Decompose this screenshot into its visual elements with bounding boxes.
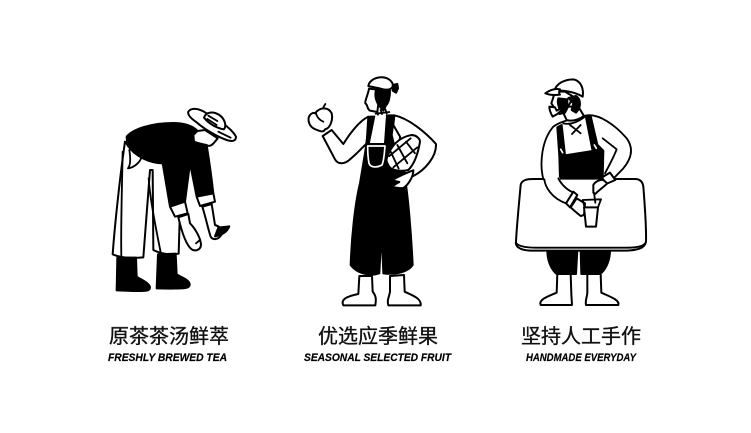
figure: barista with table and drink [516, 79, 646, 305]
basket [386, 135, 420, 171]
chinese heading: 坚持人工手作 [521, 325, 641, 348]
overall straps and bib [557, 116, 603, 179]
overalls [351, 115, 413, 275]
english subtitle: SEASONAL SELECTED FRUIT [304, 352, 452, 364]
left arm glove and leaf [197, 193, 229, 239]
black sweater and arms [127, 123, 213, 207]
english subtitle: FRESHLY BREWED TEA [108, 352, 227, 364]
shirt and collar [370, 109, 389, 143]
left arm raised [323, 117, 368, 163]
chinese heading: 优选应季鲜果 [318, 325, 438, 348]
english subtitle: HANDMADE EVERYDAY [526, 352, 637, 364]
head [193, 130, 218, 146]
arm outlines [603, 138, 617, 173]
hand holding basket [392, 170, 413, 188]
collar and x mark [563, 117, 584, 134]
cap [545, 79, 583, 97]
bib pocket [368, 146, 385, 167]
boots [540, 274, 619, 305]
caption: seasonal selected fruit [304, 325, 452, 364]
table [516, 179, 646, 251]
drink cup [583, 199, 601, 227]
trousers [547, 250, 610, 274]
caption: handmade everyday [521, 325, 641, 364]
face [365, 89, 380, 112]
caption: freshly brewed tea [108, 325, 229, 364]
straw hat [188, 109, 236, 141]
right cuff and hand [593, 173, 615, 203]
right arm [393, 115, 436, 176]
trousers [113, 142, 180, 258]
left sleeve [544, 177, 575, 204]
right arm glove [170, 202, 201, 250]
boots [343, 275, 421, 305]
headband [368, 77, 398, 93]
torso [542, 115, 631, 182]
left cuff and hand [566, 192, 585, 216]
beard and hair [558, 96, 580, 113]
neck [563, 107, 584, 121]
face [551, 92, 573, 114]
hair [375, 90, 390, 111]
figure: man holding apple and basket [309, 77, 436, 305]
ear [375, 93, 377, 101]
apple in hand [309, 104, 332, 131]
figure: farmer bending to pick tea [113, 109, 236, 291]
chinese heading: 原茶茶汤鲜萃 [109, 325, 229, 348]
pipe [549, 105, 567, 117]
boots [117, 254, 190, 291]
